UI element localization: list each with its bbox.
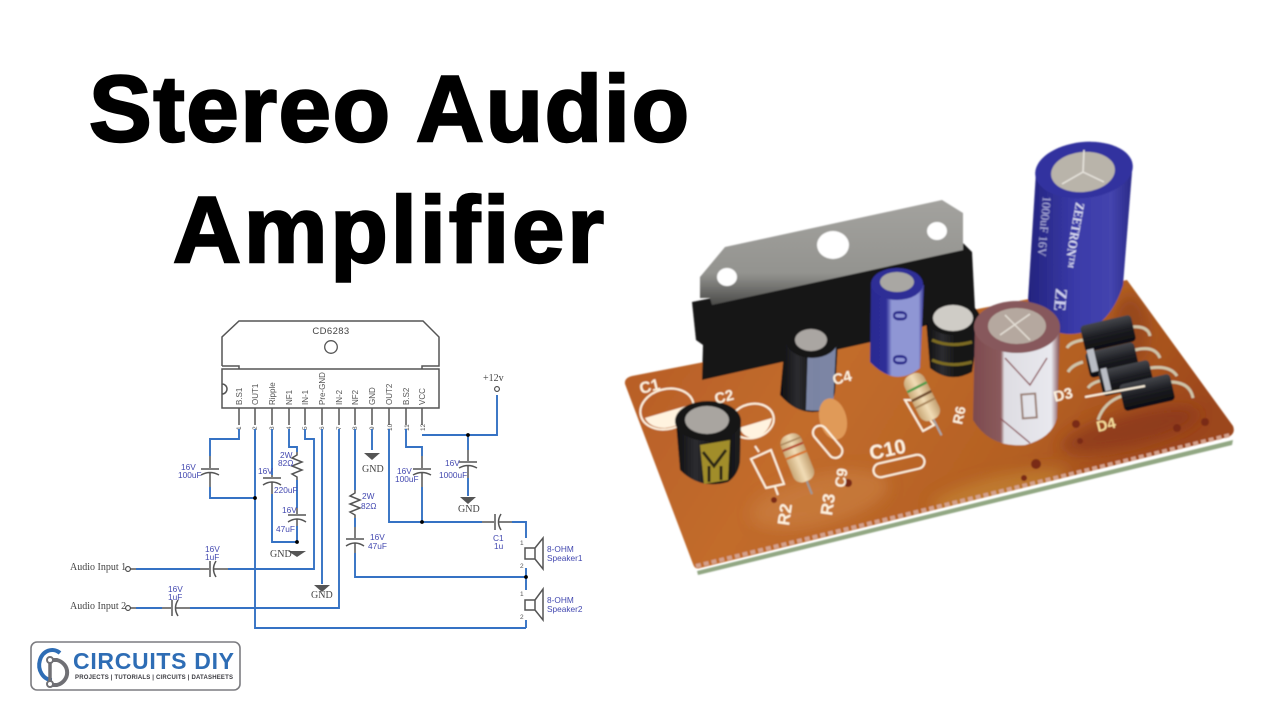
silkscreen text: C9 (832, 467, 852, 489)
speaker pin numbers: 2 (520, 614, 524, 621)
IC pin labels: NF2 (351, 389, 360, 405)
small blue capacitor: 0 (890, 310, 912, 322)
IC package CD6283 (222, 321, 439, 408)
photo: amplifier board (625, 137, 1234, 575)
IC body (692, 243, 975, 380)
IC pin labels: GND (368, 387, 377, 405)
pin numbers: 10 (387, 423, 394, 431)
pin numbers: 4 (286, 426, 293, 430)
component values (168, 450, 583, 614)
component values: 1000uF (439, 470, 467, 480)
title (89, 56, 689, 282)
component values: 100uF (395, 474, 419, 484)
pin numbers (236, 423, 427, 431)
component values: 16V (258, 466, 273, 476)
serif labels (70, 373, 504, 612)
pin numbers: 2 (252, 426, 259, 430)
IC pin labels: B.S1 (235, 387, 244, 405)
component values: 16V (168, 584, 183, 594)
pin numbers: 5 (302, 426, 309, 430)
board shadow (697, 440, 1233, 575)
pin numbers: 7 (336, 426, 343, 430)
component values: 220uF (274, 485, 298, 495)
IC pin labels: OUT2 (385, 383, 394, 405)
resistors (292, 452, 360, 518)
circuit schematic (70, 321, 583, 628)
IC pin labels: OUT1 (251, 383, 260, 405)
silkscreen text (638, 368, 1118, 527)
speaker pin numbers: 2 (520, 563, 524, 570)
IC pin labels (235, 372, 427, 405)
pin stubs (239, 408, 422, 425)
IC pin labels: VCC (418, 388, 427, 405)
component values: 8-OHM (547, 544, 574, 554)
logo icon (39, 650, 67, 687)
component values: 16V (445, 458, 460, 468)
silkscreen text: C10 (867, 436, 908, 465)
small blue capacitor: 0 (890, 354, 912, 366)
logo tagline: PROJECTS | TUTORIALS | CIRCUITS | DATASHEETS (75, 675, 233, 681)
pin numbers: 11 (404, 424, 411, 431)
terminals (126, 387, 499, 610)
ground symbols (288, 453, 476, 592)
mounting holes (717, 222, 947, 286)
IC pin labels: B.S2 (402, 387, 411, 405)
IC pin labels: IN-1 (301, 389, 310, 405)
silkscreen text: R3 (817, 492, 839, 517)
speaker 2 (525, 589, 543, 620)
pin numbers: 8 (352, 426, 359, 430)
component values: 1u (494, 541, 504, 551)
component values: 47uF (368, 541, 387, 551)
serif labels: GND (270, 549, 292, 560)
component values: Speaker1 (547, 553, 583, 563)
right black capacitor (926, 301, 980, 377)
speaker pin numbers (520, 540, 524, 621)
junction dots (253, 433, 528, 579)
component values: 16V (282, 505, 297, 515)
diodes (1067, 314, 1193, 420)
component values: 2W (362, 491, 375, 501)
silkscreen text: D3 (1052, 385, 1075, 406)
PCB board (625, 280, 1234, 568)
big blue capacitor: ZEETRON™ (1062, 201, 1088, 269)
speaker pin numbers: 1 (520, 591, 524, 598)
black capacitor front left (675, 401, 741, 484)
title line 2: Amplifier (173, 177, 604, 282)
silkscreen text: C2 (713, 387, 736, 408)
logo frame (31, 642, 240, 690)
IC pin labels: NF1 (285, 389, 294, 405)
logo: Circuits DIY (31, 642, 240, 690)
component values: 1uF (168, 592, 182, 602)
silkscreen text: C4 (831, 368, 854, 389)
black capacitor centre (780, 322, 838, 412)
pin numbers: 6 (319, 426, 326, 430)
big blue capacitor: ZE (1050, 288, 1071, 312)
IC pin labels: Ripple (268, 382, 277, 405)
silkscreen outlines (636, 383, 1145, 495)
silkscreen text: D4 (1095, 415, 1118, 436)
component values: 47uF (276, 524, 295, 534)
heat sink tab (700, 200, 963, 305)
serif labels: GND (458, 504, 480, 515)
IC pin labels: IN-2 (335, 389, 344, 405)
big blue capacitor (1028, 137, 1136, 334)
component values: 16V (370, 532, 385, 542)
component values: 8-OHM (547, 595, 574, 605)
component values: 16V (397, 466, 412, 476)
speaker 1 (525, 538, 543, 569)
speaker pin numbers: 1 (520, 540, 524, 547)
serif labels: +12v (483, 373, 504, 384)
pin numbers: 9 (369, 426, 376, 430)
maroon capacitor (973, 301, 1060, 445)
silkscreen text: C1 (638, 376, 662, 398)
silkscreen text: R2 (774, 502, 796, 527)
component values: 16V (205, 544, 220, 554)
ceramic capacitor C9 (815, 395, 851, 443)
circuit wires (136, 395, 526, 628)
pin numbers: 1 (236, 426, 243, 430)
component values: 2W (280, 450, 293, 460)
small blue capacitor (870, 268, 924, 377)
resistor R6 (901, 370, 951, 440)
pin numbers: 12 (420, 423, 427, 431)
capacitors (130, 450, 512, 616)
component values: 16V (181, 462, 196, 472)
logo wordmark: CIRCUITS DIY (73, 648, 234, 674)
component values: 82Ω (361, 501, 376, 511)
component values: 82Ω (278, 458, 293, 468)
component values: 1uF (205, 552, 219, 562)
component values: C1 (493, 533, 504, 543)
serif labels: GND (311, 590, 333, 601)
title line 1: Stereo Audio (89, 56, 689, 161)
component values: 100uF (178, 470, 202, 480)
jagged board edge (696, 435, 1230, 566)
board tones (746, 295, 1202, 541)
serif labels: Audio Input 2 (70, 601, 126, 612)
IC package CD6283: CD6283 (312, 326, 350, 337)
resistor R3 (778, 431, 822, 498)
silkscreen text: R6 (949, 405, 969, 426)
pin numbers: 3 (269, 426, 276, 430)
board via holes (771, 418, 1209, 503)
serif labels: GND (362, 464, 384, 475)
IC pin labels: Pre-GND (318, 372, 327, 405)
big blue capacitor: 1000uF 16V (1035, 196, 1054, 257)
component values: Speaker2 (547, 604, 583, 614)
serif labels: Audio Input 1 (70, 562, 126, 573)
